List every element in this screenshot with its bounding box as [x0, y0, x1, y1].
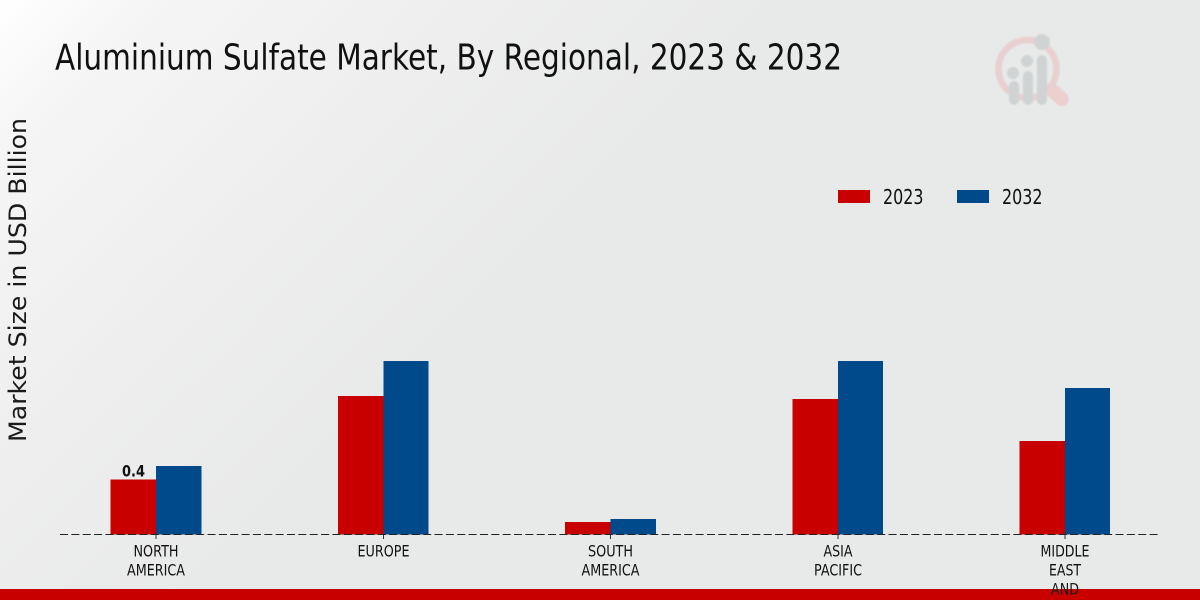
group: South America: AMERICA	[582, 560, 640, 580]
group: Asia Pacific: PACIFIC	[814, 560, 862, 580]
y axis label: Market Size in USD Billion	[4, 118, 32, 442]
footer bar	[0, 589, 1200, 600]
group: North America: 0.4	[122, 462, 145, 480]
bar chart	[60, 361, 1160, 580]
group: Middle East and Africa: EAST	[1049, 560, 1081, 580]
group: Europe	[338, 361, 428, 560]
group: Asia Pacific: ASIA	[824, 542, 853, 560]
legend	[838, 185, 1042, 209]
group: Asia Pacific	[792, 361, 883, 580]
title: Aluminium Sulfate Market, By Regional, 2023 & 2032	[55, 38, 842, 78]
group: Middle East and Africa: MIDDLE	[1040, 542, 1090, 560]
group: Europe: EUROPE	[358, 542, 410, 560]
legend item: 2032	[957, 185, 1042, 209]
group: Middle East and Africa	[1020, 388, 1110, 580]
group: North America	[110, 462, 202, 580]
group: South America	[565, 519, 656, 580]
group: North America: AMERICA	[127, 560, 185, 580]
group: South America: SOUTH	[588, 542, 633, 560]
axis baseline	[60, 534, 1160, 536]
group: North America: NORTH	[134, 542, 178, 560]
legend item: 2023: 2023	[883, 185, 924, 209]
legend item: 2032: 2032	[1002, 185, 1042, 209]
legend item: 2023	[838, 185, 924, 209]
clipped axis label: AND: AND	[1051, 580, 1079, 598]
watermark logo	[998, 34, 1062, 105]
